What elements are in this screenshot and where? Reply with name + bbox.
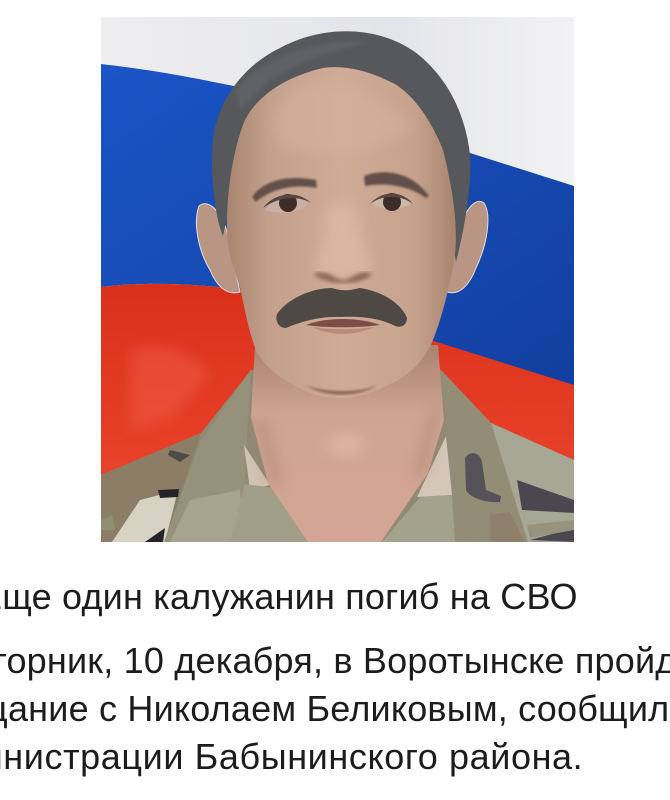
ears (196, 201, 488, 293)
shirt front (230, 484, 310, 542)
hair (212, 31, 470, 262)
portrait photo (101, 17, 574, 542)
uniform (101, 370, 574, 542)
right collar (441, 370, 528, 542)
chin shadow (305, 385, 378, 395)
face (227, 67, 456, 398)
right shoulder camouflage (491, 423, 574, 542)
mouth (306, 319, 380, 327)
neck (251, 345, 444, 542)
undershirt (244, 445, 270, 490)
eyes (263, 193, 413, 213)
article text (0, 642, 670, 777)
left shoulder camouflage (101, 433, 201, 542)
eyebrows (252, 172, 429, 202)
left collar (164, 370, 251, 542)
flag (101, 17, 574, 542)
moustache (276, 288, 407, 328)
nose (314, 205, 372, 283)
